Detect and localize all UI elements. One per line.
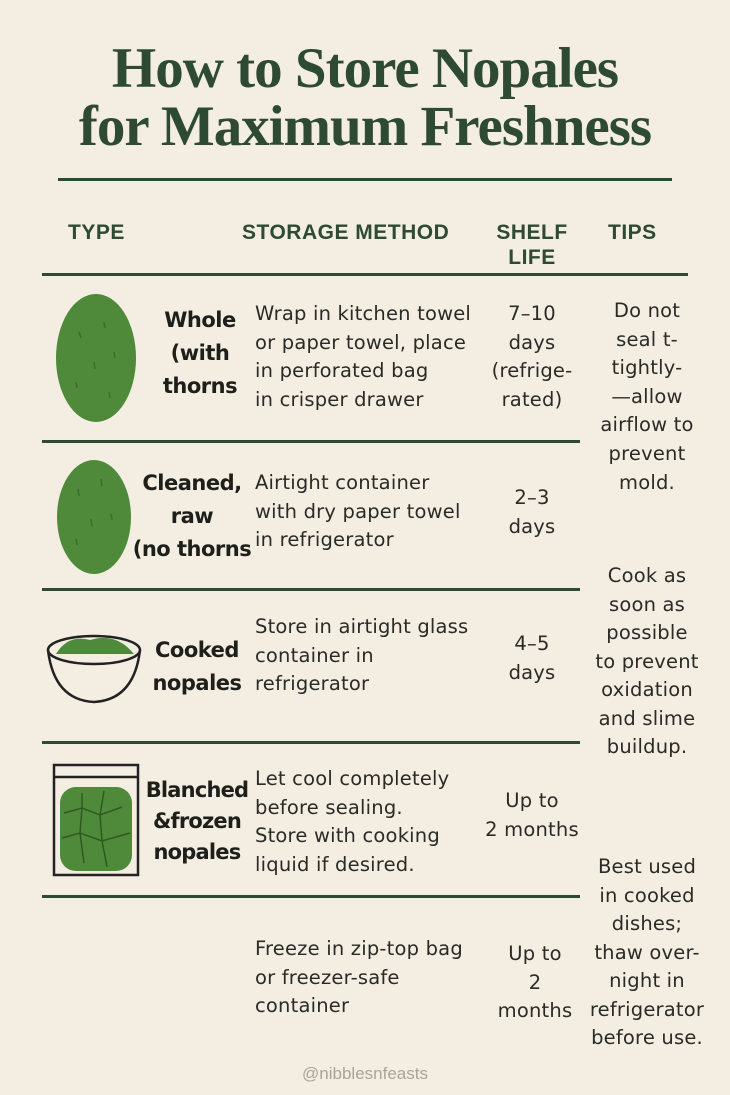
method: cooked: refrigerator	[255, 672, 369, 695]
shelf: freeze	[498, 942, 572, 1022]
method: cooked: container in	[255, 644, 374, 666]
tip: whole/cleaned: prevent	[609, 442, 685, 465]
header: shelf life	[496, 221, 568, 269]
type: blanched frozen	[146, 778, 248, 864]
method: blanched: Store with cooking	[255, 824, 440, 847]
method: cleaned: with dry paper towel	[255, 500, 461, 522]
method: blanched	[255, 767, 449, 876]
tip: frozen: thaw over-	[594, 940, 700, 964]
tip: cooked	[595, 564, 699, 758]
method: whole: or paper towel, place	[255, 330, 466, 354]
method: cleaned: in refrigerator	[255, 528, 394, 551]
shelf: freeze: months	[498, 999, 572, 1022]
method: freeze: container	[255, 994, 349, 1017]
tip: whole/cleaned: Do not	[614, 299, 680, 322]
tip: cooked: Cook as	[608, 564, 686, 587]
icon: cleaned pad	[57, 460, 131, 574]
method: whole: in crisper drawer	[255, 388, 424, 410]
type: cooked: Cooked	[155, 638, 239, 662]
method: freeze: Freeze in zip-top bag	[255, 937, 463, 960]
shelf: blanched: 2 months	[485, 818, 579, 840]
tip: frozen: night in	[609, 969, 685, 992]
method: blanched: Let cool completely	[255, 767, 449, 790]
shelf: freeze: Up to	[508, 942, 562, 965]
type: blanched frozen: nopales	[154, 840, 240, 864]
shelf: whole	[492, 302, 572, 410]
tip: cooked: buildup.	[607, 735, 687, 758]
header: shelf life: LIFE	[508, 246, 556, 269]
tip: whole/cleaned: —allow	[611, 385, 683, 408]
tip: cooked: soon as	[609, 592, 685, 616]
tip: frozen: Best used	[598, 855, 696, 878]
method: whole	[255, 302, 471, 410]
tip: cooked: to prevent	[595, 650, 699, 672]
method: whole: Wrap in kitchen towel	[255, 302, 471, 325]
tip: frozen: in cooked	[599, 884, 695, 906]
tip: cooked: possible	[606, 621, 688, 644]
shelf: freeze: 2	[529, 970, 541, 994]
tip: frozen: before use.	[591, 1026, 703, 1049]
type: cleaned: raw	[171, 504, 213, 528]
method: cleaned	[255, 471, 461, 551]
shelf: whole: 7–10	[508, 302, 556, 325]
tip: whole/cleaned: airflow to	[600, 413, 694, 436]
icon: freezer bag	[52, 764, 140, 876]
method: cooked	[255, 615, 468, 695]
tip: frozen	[590, 855, 704, 1049]
tip: frozen: refrigerator	[590, 998, 704, 1020]
icon: whole nopal pad	[56, 294, 136, 422]
method: blanched: before sealing.	[255, 796, 403, 818]
method: freeze: or freezer-safe	[255, 966, 400, 988]
shelf: cooked: days	[509, 660, 555, 684]
method: cooked: Store in airtight glass	[255, 615, 468, 638]
tip: cooked: and slime	[599, 706, 695, 730]
title: How to Store Nopales	[112, 37, 618, 100]
tip: whole/cleaned	[600, 299, 694, 494]
icon: bowl	[46, 634, 142, 704]
method: blanched: liquid if desired.	[255, 852, 415, 876]
shelf: cleaned: days	[509, 514, 555, 538]
header: tips: TIPS	[608, 221, 657, 244]
header: shelf life: SHELF	[496, 221, 568, 244]
credit: @nibblesnfeasts	[302, 1064, 428, 1083]
type: cleaned: Cleaned,	[142, 471, 242, 495]
shelf: blanched	[485, 789, 579, 840]
title: for Maximum Freshness	[79, 95, 651, 158]
method: cleaned: Airtight container	[255, 471, 429, 494]
type: whole: Whole	[164, 308, 236, 332]
tip: frozen: dishes;	[612, 912, 682, 935]
method: freeze	[255, 937, 463, 1017]
tip: whole/cleaned: seal t-	[616, 328, 678, 351]
type: cooked: nopales	[152, 671, 242, 695]
shelf: blanched: Up to	[505, 789, 559, 812]
type: whole: thorns	[163, 374, 237, 398]
type: whole: (with	[171, 341, 229, 365]
type: blanched frozen: Blanched	[146, 778, 248, 802]
shelf: cooked: 4–5	[514, 632, 550, 655]
method: whole: in perforated bag	[255, 359, 428, 382]
tip: cooked: oxidation	[601, 678, 693, 701]
tip: whole/cleaned: mold.	[619, 471, 675, 494]
header: storage method: STORAGE METHOD	[242, 221, 449, 244]
shelf: cleaned	[509, 486, 555, 538]
type: whole	[163, 308, 237, 398]
type: cleaned: (no thorns	[133, 537, 251, 561]
shelf: cooked	[509, 632, 555, 684]
shelf: whole: rated)	[502, 388, 562, 410]
type: blanched frozen: &frozen	[153, 809, 241, 833]
type: cooked	[152, 638, 242, 695]
title	[79, 37, 651, 158]
tip: whole/cleaned: tightly-	[612, 356, 682, 379]
shelf: whole: days	[509, 330, 555, 354]
header: type: TYPE	[68, 221, 125, 244]
shelf: whole: (refrige-	[492, 359, 572, 382]
type: cleaned	[133, 471, 251, 561]
shelf: cleaned: 2–3	[514, 486, 550, 509]
